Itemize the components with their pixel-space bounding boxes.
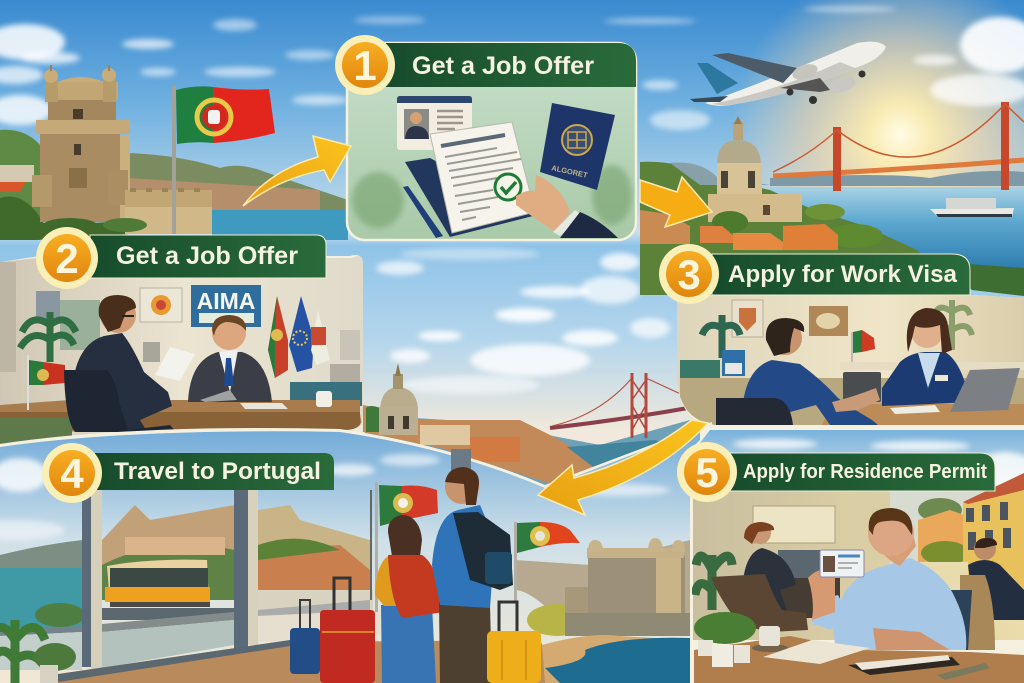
document in hand — [155, 347, 195, 381]
person: applicant — [716, 318, 880, 425]
plane — [690, 42, 886, 106]
Portuguese flag top — [172, 86, 275, 234]
header: step 3 — [712, 254, 970, 295]
sand and sea — [542, 635, 656, 683]
window frames — [0, 490, 380, 670]
sea view — [0, 540, 82, 568]
clouds — [733, 439, 1024, 488]
header: step 4: Travel to Portugal — [114, 458, 321, 485]
header: step 1 — [385, 43, 636, 87]
badge: 1 — [335, 35, 395, 95]
luggage: red — [320, 578, 375, 683]
office interior — [693, 490, 1024, 640]
header: step 4 — [95, 453, 334, 490]
badge: 2: 2 — [55, 235, 79, 282]
flags: Portugal and EU — [268, 296, 330, 378]
notebook — [848, 655, 990, 680]
icon: id card — [397, 96, 472, 150]
panel: step 2 — [0, 227, 364, 450]
Belem tower — [32, 65, 212, 238]
chair behind man — [950, 590, 972, 650]
chair — [711, 574, 808, 632]
icon: pen — [403, 186, 443, 238]
badge: 3: 3 — [677, 251, 701, 298]
foliage — [352, 165, 632, 228]
icon: passport — [540, 103, 615, 190]
hills behind fort — [515, 540, 690, 620]
panel: step 1 — [335, 35, 636, 240]
monitor — [843, 372, 881, 402]
paper — [890, 405, 940, 414]
desk — [0, 400, 362, 432]
icon: job contract document — [430, 122, 535, 233]
clouds in panel — [0, 454, 670, 540]
sign: AIMA — [191, 285, 261, 327]
panel: step 3 — [659, 244, 1024, 430]
golden gate bridge right — [773, 102, 1024, 191]
badge: 5 — [677, 442, 737, 502]
window and wall detail — [0, 262, 360, 372]
badge: 3 — [659, 244, 719, 304]
foliage below desk — [0, 418, 72, 444]
badge: 5: 5 — [695, 449, 719, 496]
badge: 1: 1 — [353, 42, 377, 89]
flag on desk — [27, 355, 65, 410]
tram — [105, 560, 210, 607]
centre skyline — [363, 363, 690, 500]
monitor — [778, 550, 820, 578]
badge: 4 — [42, 443, 102, 503]
panel: step 5 — [677, 428, 1024, 683]
red roofed houses — [640, 204, 883, 250]
arrow to step 3 — [640, 177, 712, 227]
person: woman traveller — [375, 515, 444, 683]
badge: 4: 4 — [60, 450, 84, 497]
counter — [680, 378, 1024, 428]
wall decorations — [680, 300, 1024, 378]
sign: AIMA: AIMA — [197, 288, 255, 314]
pole: behind man — [451, 449, 471, 479]
laptop — [950, 368, 1020, 412]
header: step 2: Get a Job Offer — [116, 242, 298, 270]
header: step 1: Get a Job Offer — [412, 52, 594, 80]
belem fort right — [565, 538, 690, 636]
window view with buildings — [890, 473, 1024, 600]
top-left landscape: hills and sea — [0, 130, 348, 240]
luggage: navy — [290, 600, 320, 674]
right sea and shore — [640, 162, 1024, 296]
person: right background — [968, 538, 1024, 620]
person: agent — [882, 308, 970, 406]
potted plants — [694, 612, 756, 667]
ferry boat — [930, 198, 1014, 217]
header: step 5 — [720, 453, 995, 491]
papers on desk — [240, 403, 288, 409]
cup — [752, 626, 788, 652]
mug — [316, 391, 332, 407]
plants — [0, 620, 76, 683]
person: applicant back view — [64, 295, 176, 432]
arrow to step 4 — [538, 420, 708, 515]
person: woman background — [742, 522, 796, 620]
flag: centre — [370, 482, 438, 612]
lisbon hillside — [102, 505, 234, 565]
arrow to step 1 — [243, 136, 351, 206]
panel: step 4 — [0, 422, 712, 683]
person: main man with card — [808, 508, 966, 650]
luggage: yellow — [487, 602, 541, 683]
desk — [822, 404, 1024, 425]
icon: hand holding contract — [516, 175, 618, 238]
plant — [695, 555, 732, 610]
paper on desk — [763, 640, 870, 664]
left foliage — [35, 603, 85, 627]
icon: passport: ALGORET — [551, 163, 589, 180]
badge: 2 — [36, 227, 98, 289]
chair behind — [960, 575, 995, 650]
plant — [20, 312, 76, 362]
header: step 5: Apply for Residence Permit — [743, 461, 987, 483]
clouds — [0, 6, 1024, 394]
person: officer — [188, 315, 272, 402]
flag: right — [514, 522, 580, 602]
icon: folder — [405, 158, 537, 237]
domed church right — [708, 116, 802, 222]
desk — [694, 636, 1024, 683]
person: man traveller — [432, 467, 513, 683]
header: step 3: Apply for Work Visa — [728, 261, 958, 288]
shelf and books — [290, 364, 362, 406]
sun glow — [730, 0, 1024, 305]
floor — [58, 640, 560, 683]
id card — [820, 550, 864, 577]
header: step 2 — [90, 235, 326, 278]
